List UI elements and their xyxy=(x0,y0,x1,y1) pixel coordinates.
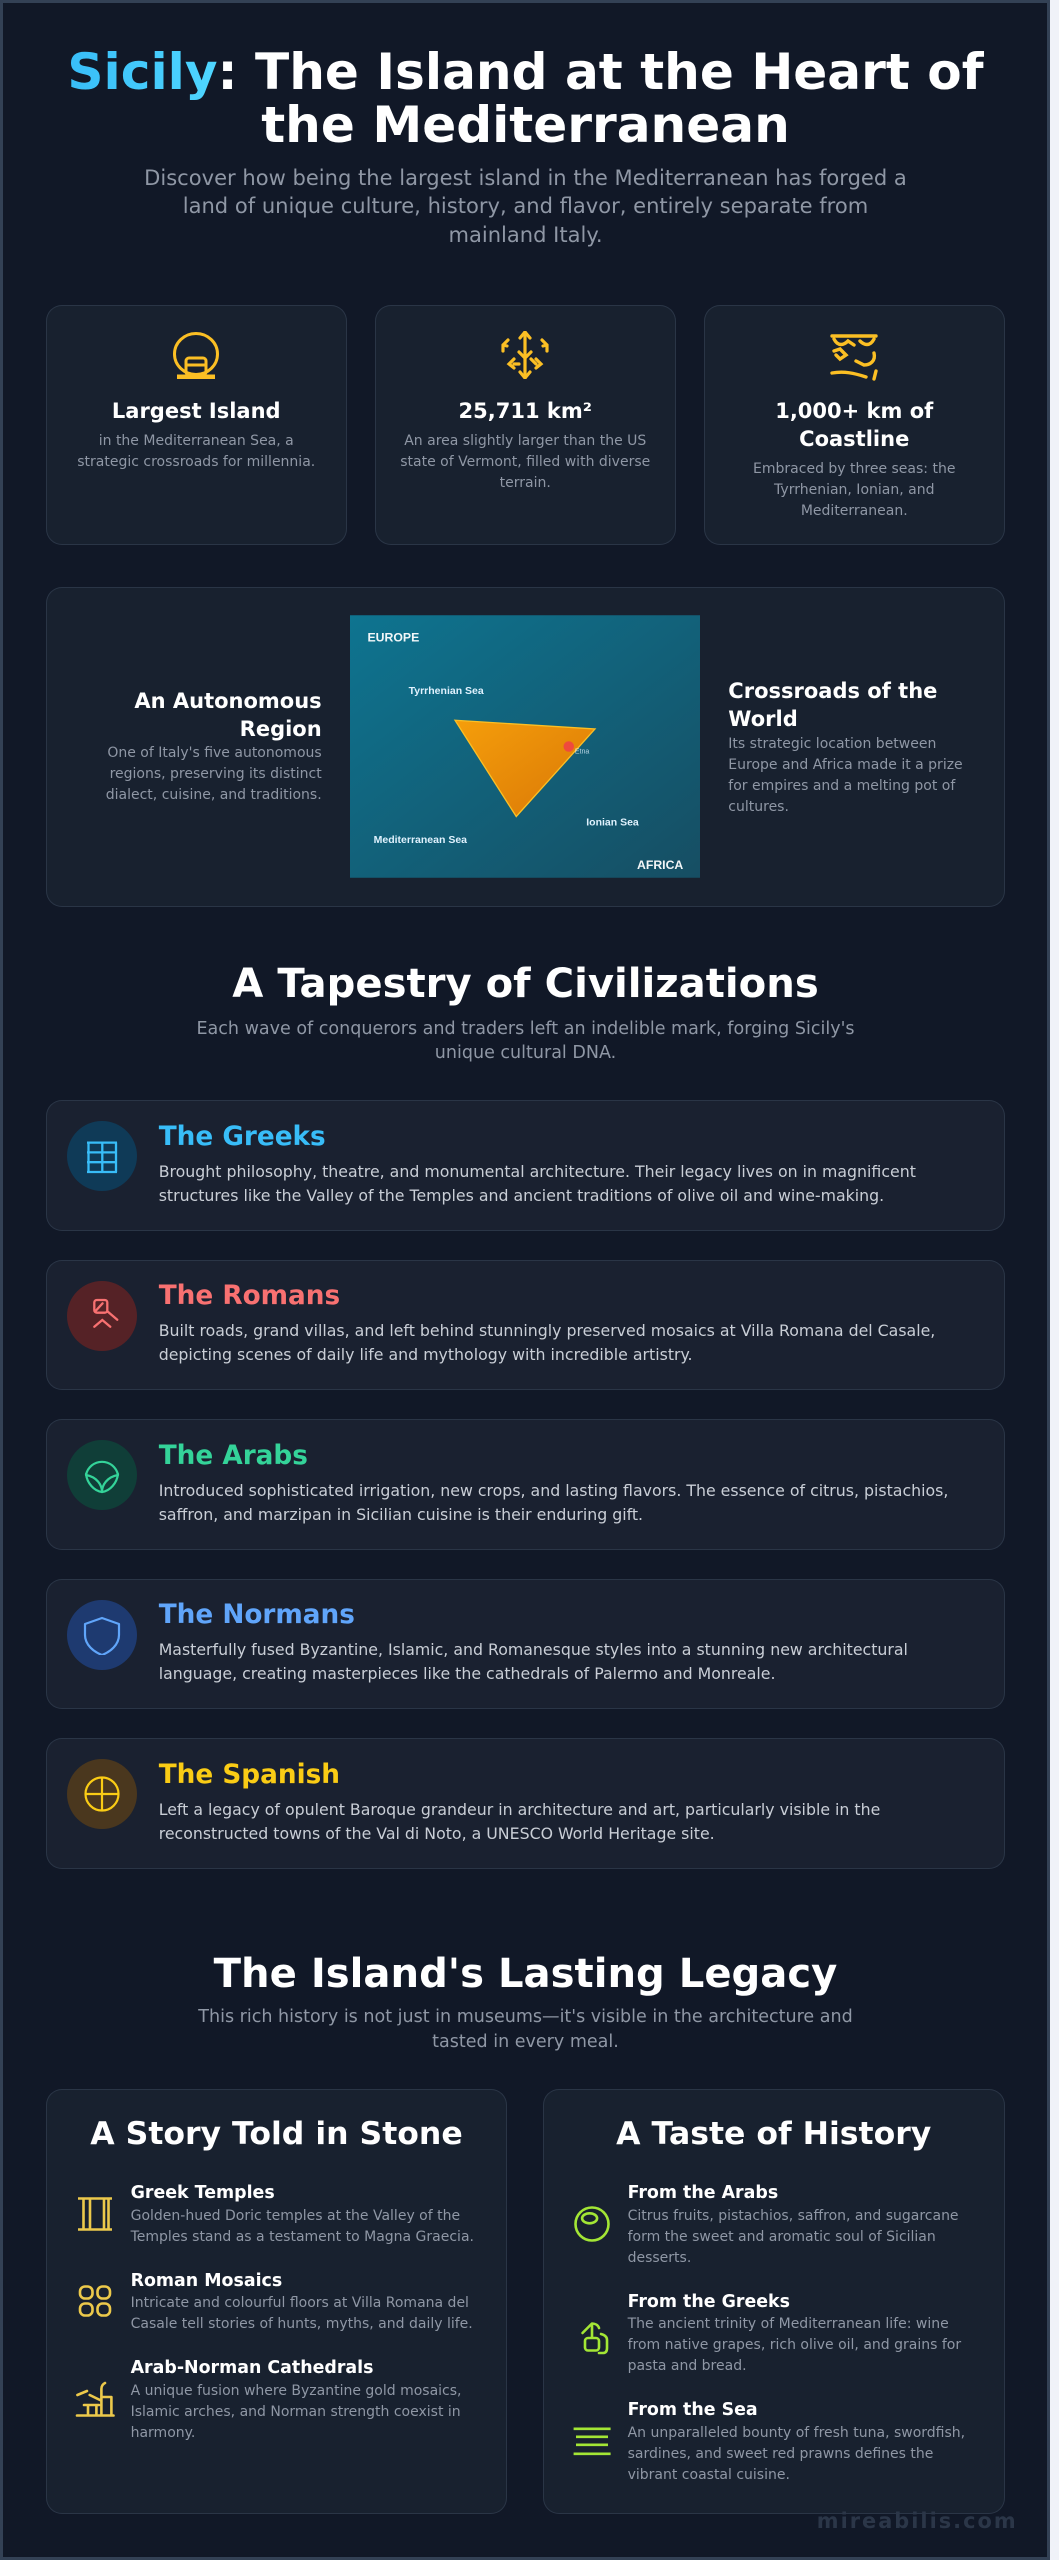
subtitle: land of unique culture, history, and flavor, entirely separate from xyxy=(183,193,868,218)
map of Sicily xyxy=(350,615,700,878)
icon: cathedral xyxy=(76,2382,115,2417)
item text: harmony. xyxy=(131,2425,195,2441)
map of Sicily: EUROPE xyxy=(368,631,419,645)
item text: Golden-hued Doric temples at the Valley of the xyxy=(131,2208,460,2224)
heading: The Romans xyxy=(159,1281,340,1311)
panel: the Normans xyxy=(46,1578,1005,1709)
subtitle: Discover how being the largest island in the Mediterranean has forged a xyxy=(144,165,907,190)
stat text xyxy=(77,433,315,470)
stat text xyxy=(753,461,955,519)
stat text: strategic crossroads for millennia. xyxy=(77,454,315,470)
icon: leaf xyxy=(67,1440,137,1510)
heading: The Greeks xyxy=(159,1122,326,1152)
heading xyxy=(134,689,322,741)
heading: The Spanish xyxy=(159,1760,340,1790)
icon: citrus xyxy=(574,2206,610,2242)
title: Sicily: The Island at the Heart of xyxy=(67,42,984,101)
heading: legacy: The Island's Lasting Legacy xyxy=(214,1950,837,1996)
icon: quartered circle xyxy=(67,1759,137,1829)
panel heading: A Story Told in Stone xyxy=(90,2116,463,2152)
title: the Mediterranean xyxy=(261,95,790,154)
stat heading: 25,711 km² xyxy=(459,398,592,422)
text: structures like the Valley of the Temples and ancient traditions of olive oil and wine-making. xyxy=(159,1186,884,1205)
panel: the Romans xyxy=(46,1260,1005,1390)
map of Sicily: Mediterranean Sea xyxy=(374,834,467,846)
item: from the Sea xyxy=(574,2400,965,2483)
item text: Casale tell stories of hunts, myths, and daily life. xyxy=(131,2316,473,2332)
text: Its strategic location between xyxy=(728,736,936,752)
item title: From the Greeks xyxy=(628,2292,790,2312)
text xyxy=(159,1321,935,1364)
stat text: An area slightly larger than the US xyxy=(404,433,646,449)
text: Masterfully fused Byzantine, Islamic, and Romanesque styles into a stunning new architectural xyxy=(159,1640,908,1659)
heading: Region xyxy=(240,717,322,741)
icon: columns xyxy=(78,2197,112,2231)
item text: Temples stand as a testament to Magna Graecia. xyxy=(131,2229,474,2245)
item text: The ancient trinity of Mediterranean life: wine xyxy=(628,2316,949,2332)
heading: An Autonomous xyxy=(134,689,322,713)
text: One of Italy's five autonomous xyxy=(107,745,322,761)
icon: mosaic tool xyxy=(67,1281,137,1351)
icon: coastline waves xyxy=(830,334,878,381)
item title: Roman Mosaics xyxy=(131,2271,282,2291)
text: regions, preserving its distinct xyxy=(110,766,322,782)
item text: sardines, and sweet red prawns defines the xyxy=(628,2446,933,2462)
stat text: Tyrrhenian, Ionian, and xyxy=(774,482,934,498)
stat text: Embraced by three seas: the xyxy=(753,461,955,477)
text: cultures. xyxy=(728,798,789,814)
stat heading xyxy=(775,398,934,450)
item text: Intricate and colourful floors at Villa Romana del xyxy=(131,2295,469,2311)
stat heading: Coastline xyxy=(799,426,909,450)
text: saffron, and marzipan in Sicilian cuisine is their enduring gift. xyxy=(159,1505,643,1524)
map of Sicily: Etna xyxy=(575,749,589,756)
text xyxy=(159,1162,916,1205)
item text: vibrant coastal cuisine. xyxy=(628,2467,790,2483)
text: reconstructed towns of the Val di Noto, a UNESCO World Heritage site. xyxy=(159,1824,715,1843)
heading: The Arabs xyxy=(159,1441,308,1471)
icon: expanding arrows xyxy=(501,331,549,379)
icon: temple grid xyxy=(67,1121,137,1191)
text: Introduced sophisticated irrigation, new crops, and lasting flavors. The essence of citrus, pistachios, xyxy=(159,1480,948,1500)
subheading: civilizations xyxy=(196,1019,855,1063)
panel: a taste of history xyxy=(543,2089,1004,2514)
item text: Citrus fruits, pistachios, saffron, and sugarcane xyxy=(628,2208,959,2224)
panel: the Spanish xyxy=(46,1738,1005,1869)
text: Built roads, grand villas, and left behind stunningly preserved mosaics at Villa Romana del Casale, xyxy=(159,1321,935,1340)
heading: The Normans xyxy=(159,1600,355,1630)
heading: Crossroads of the xyxy=(728,678,937,702)
map of Sicily: Ionian Sea xyxy=(586,816,639,828)
item text: from native grapes, rich olive oil, and grains for xyxy=(628,2337,961,2353)
text xyxy=(159,1480,948,1524)
item: Roman mosaics xyxy=(78,2271,473,2332)
item text: A unique fusion where Byzantine gold mosaics, xyxy=(131,2383,462,2399)
icon: waves xyxy=(574,2428,611,2456)
item text xyxy=(628,2316,962,2374)
subheading: legacy: tasted in every meal. xyxy=(432,2032,619,2052)
item text xyxy=(628,2423,1004,2486)
item title: From the Arabs xyxy=(628,2183,778,2203)
text: autonomous region xyxy=(106,689,322,803)
subheading: legacy xyxy=(198,2007,853,2052)
subheading: civilizations: unique cultural DNA. xyxy=(435,1043,616,1063)
item title: Greek Temples xyxy=(131,2183,275,2203)
heading: civilizations: A Tapestry of Civilizations xyxy=(232,961,819,1007)
heading xyxy=(728,678,937,730)
item title: Arab-Norman Cathedrals xyxy=(131,2358,373,2378)
watermark: mireabilis.com xyxy=(817,2509,1018,2533)
subheading: civilizations: Each wave of conquerors and traders left an indelible mark, forging Sicily's xyxy=(196,1019,855,1039)
item text xyxy=(628,2208,959,2266)
stat text: terrain. xyxy=(500,475,551,491)
map of Sicily: AFRICA xyxy=(637,858,683,872)
panel: the Arabs xyxy=(46,1419,1005,1550)
item title: From the Sea xyxy=(628,2400,758,2420)
text: Brought philosophy, theatre, and monumental architecture. Their legacy lives on in magnificent xyxy=(159,1162,916,1180)
map of Sicily: Tyrrhenian Sea xyxy=(409,685,484,697)
stat text: in the Mediterranean Sea, a xyxy=(99,433,294,449)
item: Arab-Norman cathedrals xyxy=(76,2358,462,2441)
heading: World xyxy=(728,706,798,730)
item: from the Arabs xyxy=(574,2183,959,2266)
text xyxy=(159,1800,880,1843)
text: language, creating masterpieces like the cathedrals of Palermo and Monreale. xyxy=(159,1664,775,1683)
panel: largest island stat xyxy=(46,305,346,545)
stat heading: Largest Island xyxy=(112,398,281,422)
item: from the Greeks xyxy=(581,2292,962,2374)
text: dialect, cuisine, and traditions. xyxy=(106,787,322,803)
item text xyxy=(131,2295,473,2332)
icon: island globe xyxy=(173,332,219,379)
item text: pasta and bread. xyxy=(628,2358,747,2374)
panel heading: A Taste of History xyxy=(616,2116,931,2152)
icon: mosaic tiles xyxy=(78,2285,112,2317)
text: Left a legacy of opulent Baroque grandeur in architecture and art, particularly visible in the xyxy=(159,1800,880,1818)
text: Europe and Africa made it a prize xyxy=(728,756,963,772)
subtitle xyxy=(144,165,907,247)
subtitle: mainland Italy. xyxy=(448,222,603,247)
panel: area stat xyxy=(375,305,676,545)
stat heading: 1,000+ km of xyxy=(775,398,933,422)
subheading: legacy: This rich history is not just in museums—it's visible in the architecture and xyxy=(198,2007,853,2027)
item text: Islamic arches, and Norman strength coexist in xyxy=(131,2404,461,2420)
item text: form the sweet and aromatic soul of Sicilian xyxy=(628,2229,936,2245)
text xyxy=(159,1640,908,1683)
stat text xyxy=(400,433,650,491)
item text: desserts. xyxy=(628,2250,691,2266)
item text xyxy=(130,2208,474,2245)
icon: shield xyxy=(67,1600,137,1670)
text: for empires and a melting pot of xyxy=(728,778,955,794)
text xyxy=(106,745,322,803)
text xyxy=(728,736,963,814)
text: crossroads of the world xyxy=(728,678,963,814)
stat text: Mediterranean. xyxy=(801,503,908,519)
stat text: state of Vermont, filled with diverse xyxy=(400,454,650,470)
panel: map and geography xyxy=(46,587,1005,907)
item: Greek temples xyxy=(78,2183,474,2245)
item text xyxy=(130,2383,462,2441)
item text: An unparalleled bounty of fresh tuna, swordfish, xyxy=(628,2425,965,2441)
panel: a story told in stone xyxy=(46,2089,507,2514)
title xyxy=(67,42,984,154)
text: depicting scenes of daily life and mythology with incredible artistry. xyxy=(159,1345,693,1364)
panel: coastline stat xyxy=(704,305,1004,545)
panel: the Greeks xyxy=(46,1100,1005,1231)
icon: amphora xyxy=(581,2322,608,2354)
